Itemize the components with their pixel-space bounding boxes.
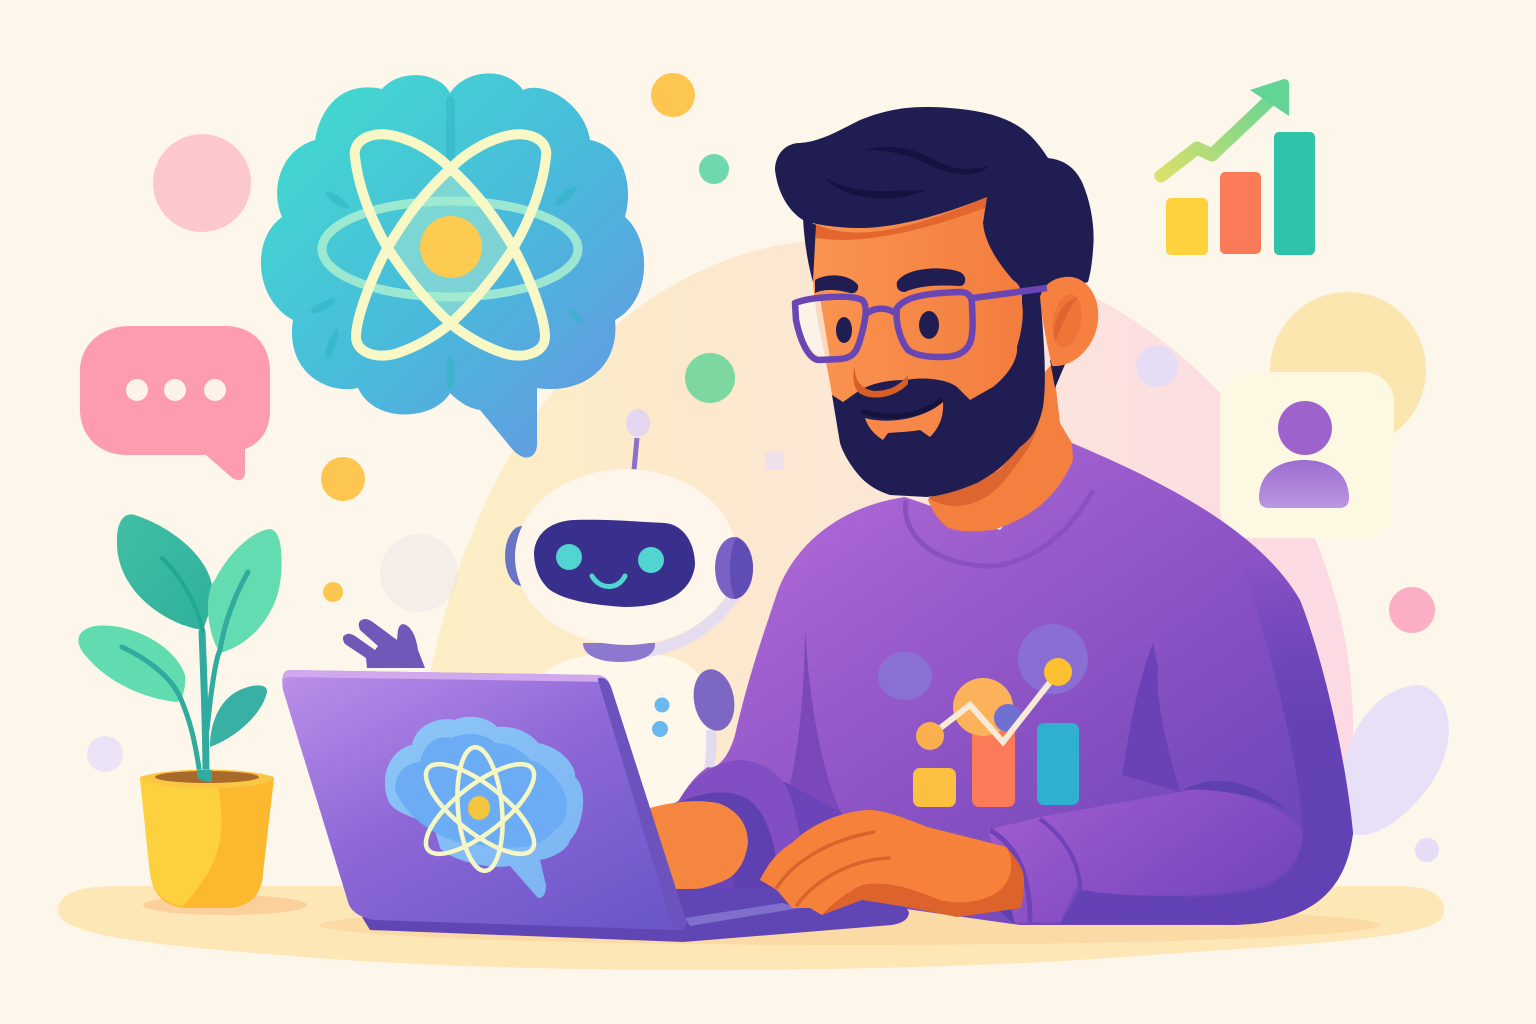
pot rim xyxy=(140,770,274,789)
growth chart icon xyxy=(1161,79,1315,255)
robot face screen xyxy=(534,520,695,607)
tilted orbit two xyxy=(356,134,546,356)
logo nucleus xyxy=(468,796,490,820)
laptop xyxy=(282,670,909,942)
hand shadow xyxy=(760,810,1024,917)
sweater wedge left xyxy=(786,625,842,815)
horizontal orbit xyxy=(322,201,578,297)
forehead shadow xyxy=(815,197,987,240)
pale blob right xyxy=(1339,685,1449,835)
sweater chart graphic xyxy=(878,624,1088,807)
robot hand xyxy=(343,619,425,668)
neck xyxy=(928,363,1073,531)
eyes xyxy=(836,317,852,343)
robot right ear inner xyxy=(730,537,753,599)
laptop logo: atom xyxy=(413,745,547,873)
ear xyxy=(1040,277,1098,366)
face xyxy=(813,190,1042,470)
left hand xyxy=(650,801,748,891)
pot body xyxy=(140,770,274,908)
robot antenna xyxy=(634,438,637,470)
elbow crease xyxy=(1183,781,1287,810)
hair xyxy=(775,107,1094,300)
plant leaf top left xyxy=(117,514,213,630)
keyboard strip xyxy=(685,903,800,926)
collar xyxy=(906,490,1093,566)
screen side edge xyxy=(598,678,686,930)
hair side strip xyxy=(803,218,816,282)
screen top highlight xyxy=(283,670,609,682)
robot right ear xyxy=(715,537,753,599)
dark area beside left sleeve xyxy=(660,770,842,896)
hair highlight xyxy=(825,147,990,199)
tilted orbit one xyxy=(355,134,545,356)
glasses left lens tint xyxy=(796,298,830,358)
laptop base xyxy=(362,887,909,942)
sweater xyxy=(678,443,1353,925)
inner ear fold xyxy=(1054,297,1078,342)
sweater wedge right xyxy=(1122,643,1180,792)
logo inner lobes xyxy=(395,734,567,848)
brain bubble shape xyxy=(261,73,644,458)
glasses xyxy=(795,288,1047,360)
atom glow xyxy=(392,175,508,320)
robot body shadow xyxy=(652,730,717,872)
inner ear xyxy=(1049,292,1085,350)
robot xyxy=(343,409,753,880)
robot head shadow xyxy=(600,585,745,658)
smile line xyxy=(862,399,942,416)
beard xyxy=(832,293,1045,497)
brain grooves xyxy=(309,96,584,392)
man xyxy=(660,107,1353,925)
pink chat bubble xyxy=(80,326,270,480)
plant leaf low right xyxy=(210,685,267,747)
plant stems xyxy=(122,558,248,780)
robot body xyxy=(545,652,712,880)
potted plant xyxy=(78,514,307,915)
robot neck xyxy=(583,643,655,662)
eyebrows xyxy=(815,275,858,293)
neck shadow xyxy=(928,423,1038,506)
atom nucleus xyxy=(420,216,482,278)
user profile card xyxy=(1220,292,1426,538)
plant leaf left xyxy=(78,626,185,702)
sweater dark right band xyxy=(1060,560,1353,924)
robot side arm xyxy=(689,666,739,734)
cuff inner band xyxy=(990,830,1030,922)
cuff line xyxy=(1040,819,1080,890)
mouth xyxy=(865,402,943,440)
robot head xyxy=(515,469,737,645)
plant leaf top right xyxy=(208,529,282,653)
cuff shadow xyxy=(993,890,1040,923)
left sleeve cuff band xyxy=(676,792,776,888)
pot soil xyxy=(155,771,259,783)
laptop logo: brain xyxy=(385,717,583,898)
decorative dots xyxy=(87,73,1439,862)
nose xyxy=(853,367,908,398)
robot left ear xyxy=(505,526,539,586)
stem base xyxy=(197,770,212,782)
table xyxy=(58,886,1444,970)
finger lines xyxy=(777,832,889,905)
pot shadow xyxy=(143,895,307,915)
pot light side xyxy=(140,778,221,906)
left sleeve xyxy=(678,760,802,888)
hand xyxy=(760,810,1011,915)
hair behind ear xyxy=(1050,360,1066,388)
forearm xyxy=(988,789,1303,923)
laptop screen xyxy=(282,670,686,930)
brain speech bubble with atom xyxy=(261,73,644,458)
table shadow xyxy=(320,905,1380,945)
background halo xyxy=(411,238,1353,900)
man's right arm and hand xyxy=(760,781,1303,923)
